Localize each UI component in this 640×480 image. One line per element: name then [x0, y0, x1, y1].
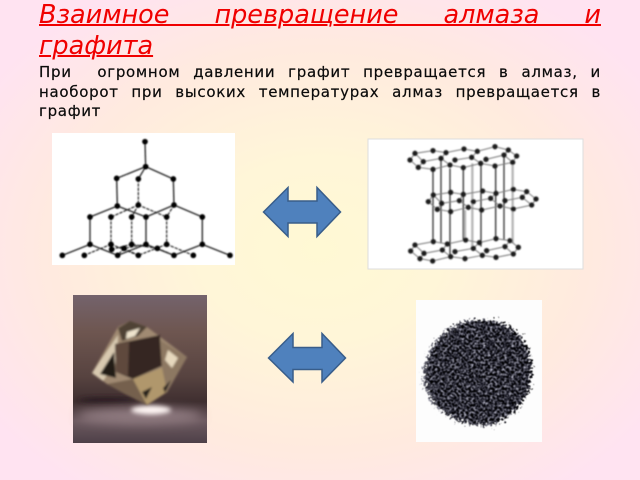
panel: diamond lattice [52, 133, 235, 265]
text block: description: графит [39, 102, 101, 120]
text block: description [39, 63, 601, 120]
text block: description: При огромном давлении графит превращается в алмаз, и [39, 63, 601, 81]
panel: diamond photo [73, 295, 207, 443]
text block: description: наоборот при высоких температурах алмаз превращается в [39, 82, 601, 100]
arrow: top double arrow [264, 188, 340, 236]
panel: graphite powder photo [416, 300, 542, 442]
atoms [407, 144, 539, 264]
top layer [410, 147, 536, 261]
crystal [92, 321, 187, 405]
title: Взаимное превращение алмаза и графита [39, 0, 601, 61]
vertical bonds [433, 155, 513, 257]
arrow: bottom double arrow [268, 334, 346, 382]
panel: graphite lattice [368, 139, 583, 269]
